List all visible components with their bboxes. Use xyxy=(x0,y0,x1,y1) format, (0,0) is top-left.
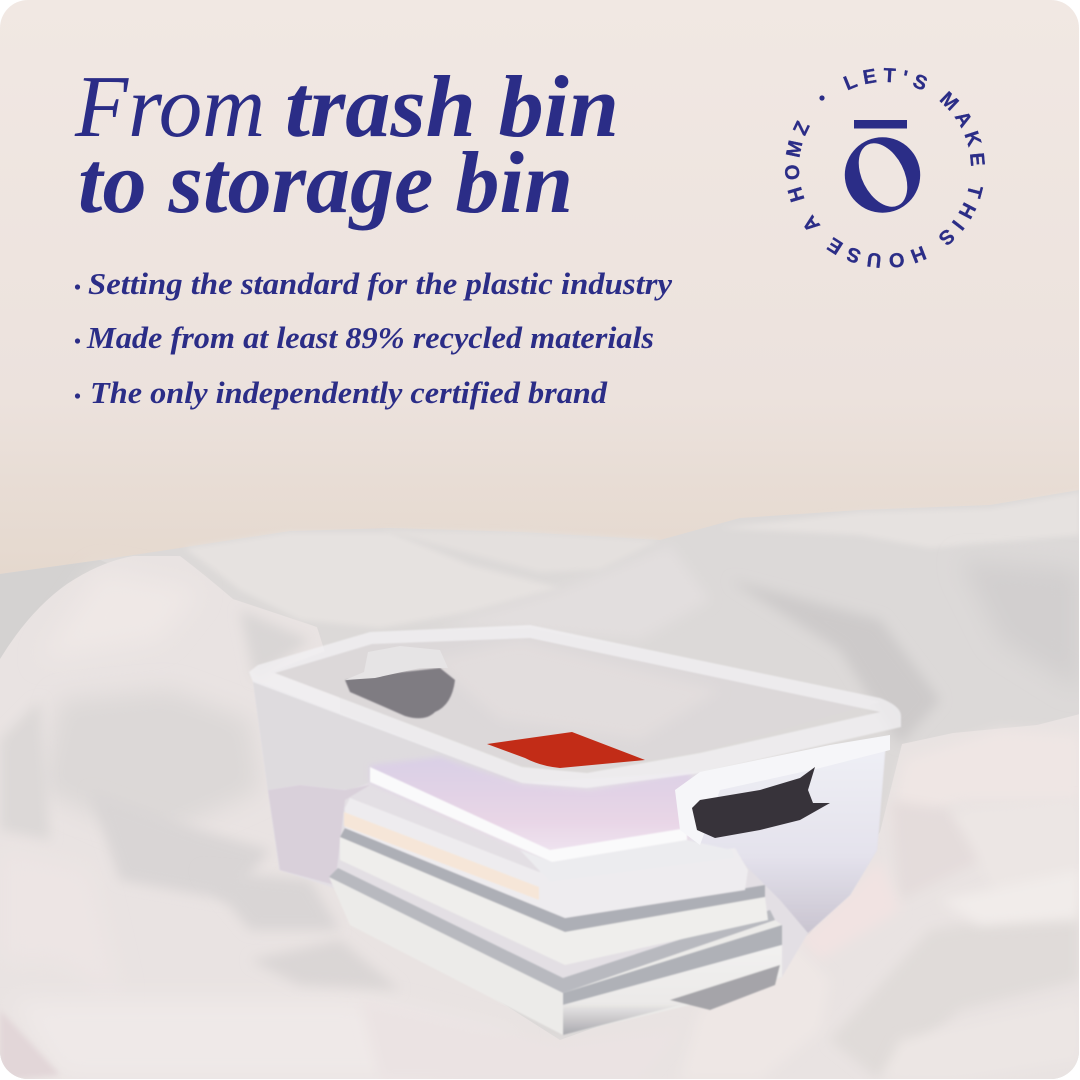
back handle xyxy=(345,646,455,718)
headline: trash bin xyxy=(285,59,619,156)
right duvet highlights and shadows xyxy=(890,730,1080,830)
second book xyxy=(345,798,748,918)
lavender reflection xyxy=(370,757,700,862)
bin right wall xyxy=(690,740,886,933)
red book xyxy=(487,732,645,768)
top book xyxy=(520,840,735,882)
bedding base xyxy=(0,490,1080,1080)
bin left wall upper xyxy=(253,680,522,790)
bullet list xyxy=(75,266,672,410)
bullet list: Made from at least 89% recycled materials xyxy=(86,320,654,355)
storage bin with books xyxy=(249,625,901,1035)
headline: From xyxy=(74,59,265,156)
logo badge: LET'S MAKE THIS HOUSE A HOMZ xyxy=(784,68,985,268)
bullet list: Setting the standard for the plastic industry xyxy=(88,266,672,301)
bin rim xyxy=(249,625,901,788)
background wall xyxy=(0,0,1080,600)
stacked books xyxy=(329,767,782,1035)
left lobe shadows xyxy=(190,570,310,680)
bedding: rumpled white duvet xyxy=(0,490,1080,1080)
bin interior back wall xyxy=(270,628,880,770)
front handle xyxy=(675,735,890,845)
bottom book xyxy=(329,877,782,1035)
headline xyxy=(74,59,619,232)
headline: to storage bin xyxy=(78,135,573,232)
bin body base xyxy=(253,680,886,1030)
bullet list: The only independently certified brand xyxy=(90,375,608,410)
bin left wall lower xyxy=(268,785,370,885)
foreground left lobe and front duvet xyxy=(0,556,1080,1080)
third book xyxy=(340,837,768,965)
